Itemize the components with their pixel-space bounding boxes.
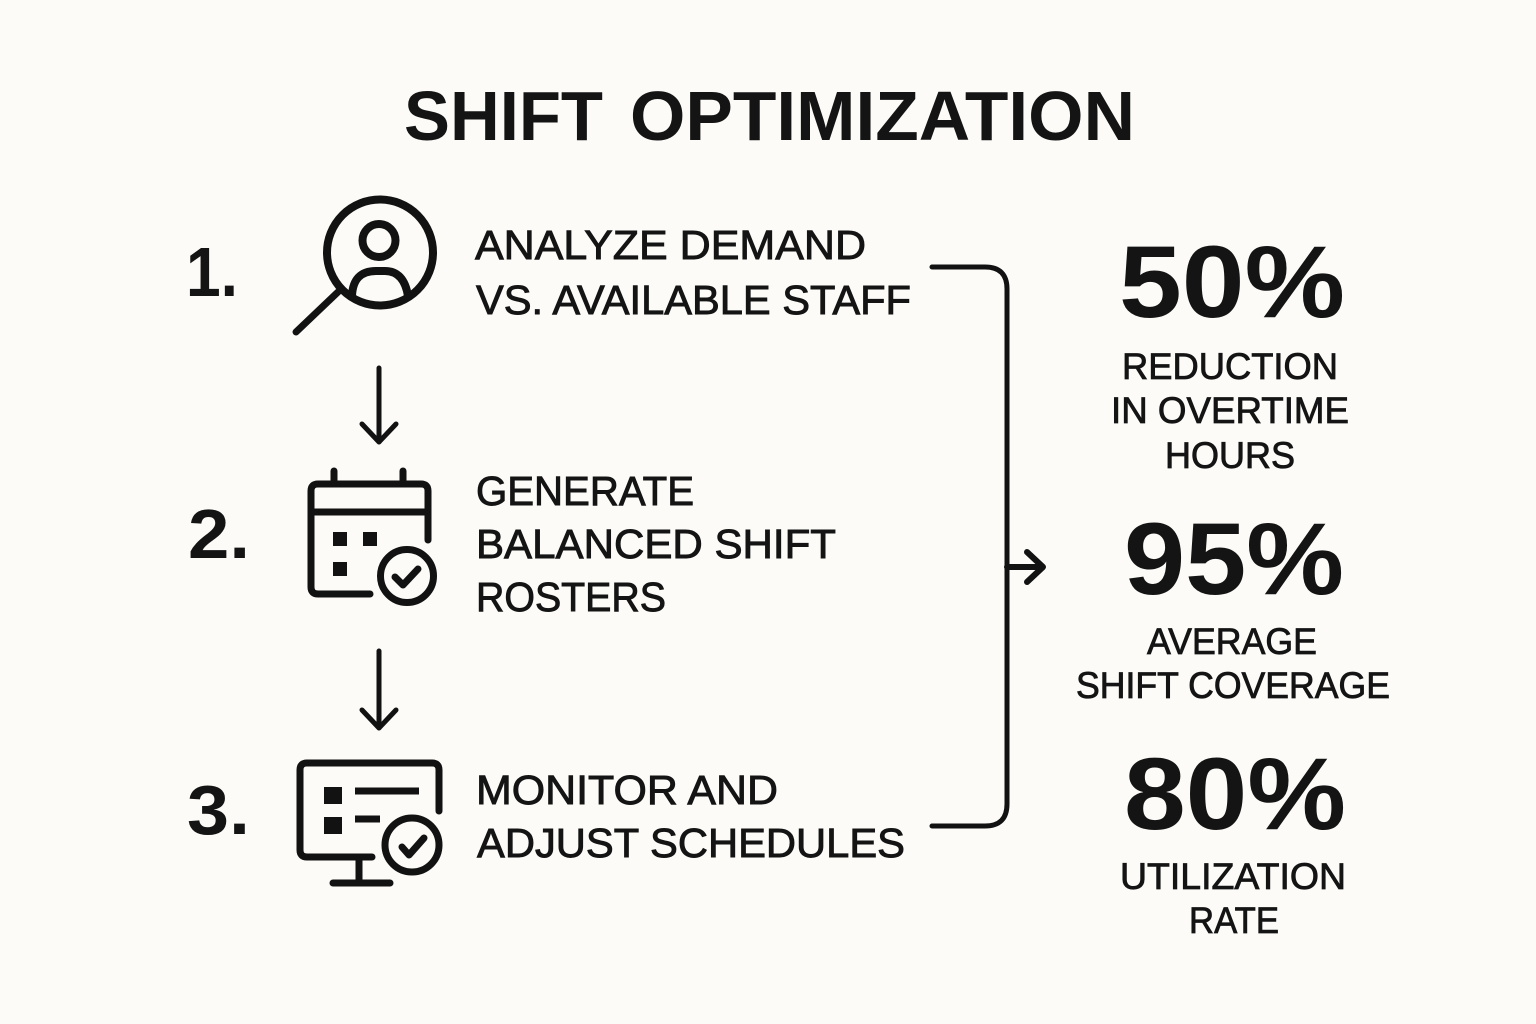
step 3 text: ADJUST SCHEDULES bbox=[477, 820, 905, 866]
stat: shift coverage: 95% bbox=[1124, 502, 1344, 616]
stat: utilization rate: RATE bbox=[1189, 900, 1279, 941]
step 2 number: 2. bbox=[188, 495, 250, 573]
stat: shift coverage bbox=[1076, 502, 1390, 706]
title: OPTIMIZATION bbox=[630, 77, 1135, 155]
arrow: step 2 to 3 bbox=[362, 651, 396, 728]
arrow: to results bbox=[1007, 552, 1043, 582]
stat: overtime reduction: IN OVERTIME bbox=[1111, 390, 1349, 431]
step 1 text bbox=[475, 222, 911, 323]
step 2 text: BALANCED SHIFT bbox=[476, 521, 836, 567]
step 3 number: 3. bbox=[187, 771, 250, 849]
stat: overtime reduction: 50% bbox=[1119, 225, 1345, 339]
icon: magnifier with person bbox=[296, 200, 433, 332]
step 2 text: GENERATE bbox=[476, 468, 694, 514]
stat: overtime reduction: REDUCTION bbox=[1122, 346, 1338, 387]
stat: overtime reduction: HOURS bbox=[1165, 435, 1295, 476]
step 2 text: ROSTERS bbox=[476, 574, 666, 620]
stat: overtime reduction bbox=[1111, 225, 1349, 476]
icon: calendar with check bbox=[311, 471, 434, 602]
bracket connector bbox=[932, 267, 1007, 826]
title bbox=[404, 77, 1135, 155]
step 1 text: VS. AVAILABLE STAFF bbox=[476, 277, 911, 323]
arrow: step 1 to 2 bbox=[362, 368, 396, 442]
step 2 text bbox=[476, 468, 836, 620]
step 3 text: MONITOR AND bbox=[476, 767, 778, 813]
step 3 text bbox=[476, 767, 905, 866]
stat: utilization rate: 80% bbox=[1124, 737, 1346, 851]
stat: shift coverage: AVERAGE bbox=[1147, 621, 1317, 662]
stat: utilization rate: UTILIZATION bbox=[1120, 856, 1346, 897]
stat: utilization rate bbox=[1120, 737, 1346, 941]
stat: shift coverage: SHIFT COVERAGE bbox=[1076, 665, 1390, 706]
title: SHIFT bbox=[404, 77, 603, 155]
step 1 text: ANALYZE DEMAND bbox=[475, 222, 866, 268]
step 1 number: 1. bbox=[186, 233, 238, 311]
icon: monitor with checklist bbox=[300, 763, 439, 883]
